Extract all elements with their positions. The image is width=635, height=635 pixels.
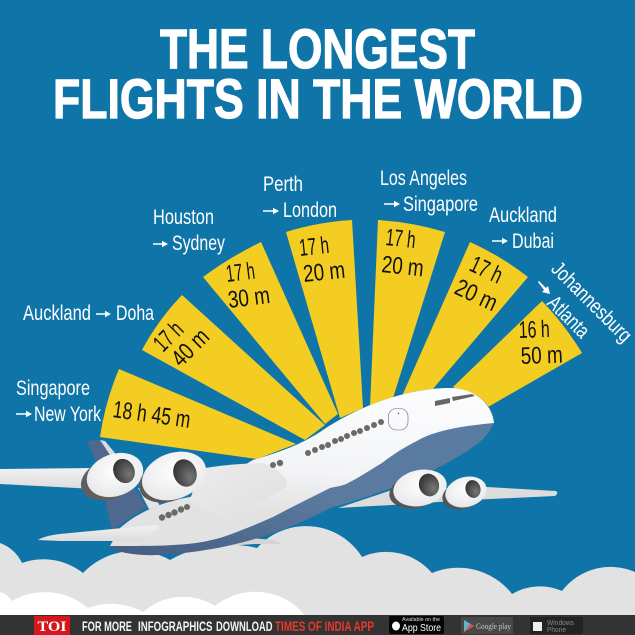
label: Singapore to New York: Singapore — [16, 377, 90, 400]
engine: far left — [75, 445, 149, 508]
badge: Google play — [461, 617, 513, 634]
ray: Houston to Sydney, 17 h 30 m — [203, 242, 338, 424]
ray: Singapore to New York, 18 h 45 m — [100, 369, 296, 459]
label: Houston to Sydney: Sydney — [172, 232, 225, 255]
clouds: front layer — [0, 592, 345, 620]
ray: Los Angeles to Singapore, 17 h 20 m: 17 h — [384, 224, 417, 254]
fuselage — [110, 388, 494, 555]
ray: Auckland to Doha, 17 h 40 m — [142, 295, 325, 440]
ray: Auckland to Doha, 17 h 40 m: 40 m — [166, 323, 215, 372]
footer message: INFOGRAPHICS — [138, 619, 212, 634]
label: Auckland to Doha: Doha — [116, 302, 154, 325]
label: Auckland to Dubai — [489, 204, 557, 253]
badge: Windows Phone — [530, 617, 583, 634]
ray: Auckland to Dubai, 17 h 20 m: 20 m — [450, 274, 502, 317]
passenger windows — [159, 419, 384, 521]
engine: right inner — [386, 465, 450, 513]
ray: Johannesburg to Atlanta, 16 h 50 m: 16 h — [518, 316, 550, 344]
ray: Johannesburg to Atlanta, 16 h 50 m: 50 m — [520, 342, 563, 370]
ray: Auckland to Dubai, 17 h 20 m — [402, 242, 528, 396]
label: Singapore to New York: New York — [34, 403, 101, 426]
footer bar — [0, 615, 635, 635]
ray: Los Angeles to Singapore, 17 h 20 m — [370, 220, 445, 407]
wing root — [190, 463, 287, 517]
badge: Windows Phone: Phone — [547, 627, 566, 634]
label: Los Angeles to Singapore — [380, 167, 478, 216]
label: Johannesburg to Atlanta: Atlanta — [542, 291, 594, 343]
label: Houston to Sydney: Houston — [153, 206, 214, 229]
badge: App Store — [389, 616, 444, 634]
engine: near left — [133, 443, 213, 511]
door — [388, 408, 408, 430]
title — [53, 17, 583, 130]
label: Los Angeles to Singapore: Singapore — [403, 193, 478, 216]
tail fin — [87, 440, 147, 530]
label: Auckland to Doha — [23, 302, 154, 325]
rear small stabilizer — [225, 538, 282, 546]
label: Houston to Sydney — [153, 206, 225, 255]
label: Auckland to Dubai: Auckland — [489, 204, 557, 227]
badge: Windows Phone: Windows — [547, 620, 574, 627]
horizontal stabilizer — [38, 525, 160, 541]
label: Perth to London: London — [283, 199, 337, 222]
ray: Auckland to Doha, 17 h 40 m: 17 h — [148, 316, 189, 357]
badge: Google play: Google play — [476, 621, 512, 631]
airplane — [0, 388, 557, 555]
footer message: DOWNLOAD — [216, 619, 273, 634]
label: Perth to London — [263, 173, 337, 222]
far wing, left — [0, 468, 95, 489]
footer message — [82, 619, 374, 634]
ray: Singapore to New York, 18 h 45 m: 18 h 45 m — [111, 396, 192, 434]
TOI logo: TOI — [38, 619, 67, 635]
footer message: FOR MORE — [82, 619, 132, 634]
ray: Auckland to Dubai, 17 h 20 m: 17 h — [465, 251, 507, 289]
ray: Houston to Sydney, 17 h 30 m: 17 h — [224, 258, 257, 288]
label: Auckland to Dubai: Dubai — [512, 230, 554, 253]
label: Perth to London: Perth — [263, 173, 303, 196]
cockpit windows — [435, 394, 475, 406]
footer message: TIMES OF INDIA APP — [275, 619, 374, 634]
ray: Johannesburg to Atlanta, 16 h 50 m — [453, 301, 582, 407]
label: Los Angeles to Singapore: Los Angeles — [380, 167, 467, 190]
badge: App Store: App Store — [402, 622, 441, 634]
right wing — [338, 487, 557, 508]
label: Auckland to Doha: Auckland — [23, 302, 91, 325]
ray: Perth to London, 17 h 20 m: 17 h — [298, 232, 330, 262]
badge: App Store: Available on the — [402, 617, 440, 623]
engine: right outer — [439, 472, 490, 514]
ray: Perth to London, 17 h 20 m — [286, 220, 363, 418]
ray: Houston to Sydney, 17 h 30 m: 30 m — [226, 282, 271, 314]
label: Singapore to New York — [16, 377, 101, 426]
title: THE LONGEST — [160, 17, 475, 80]
ray: Los Angeles to Singapore, 17 h 20 m: 20 m — [380, 251, 425, 282]
ray: Perth to London, 17 h 20 m: 20 m — [302, 257, 346, 288]
TOI logo — [34, 616, 70, 635]
clouds: back layer — [0, 526, 635, 620]
pylon — [138, 488, 160, 511]
